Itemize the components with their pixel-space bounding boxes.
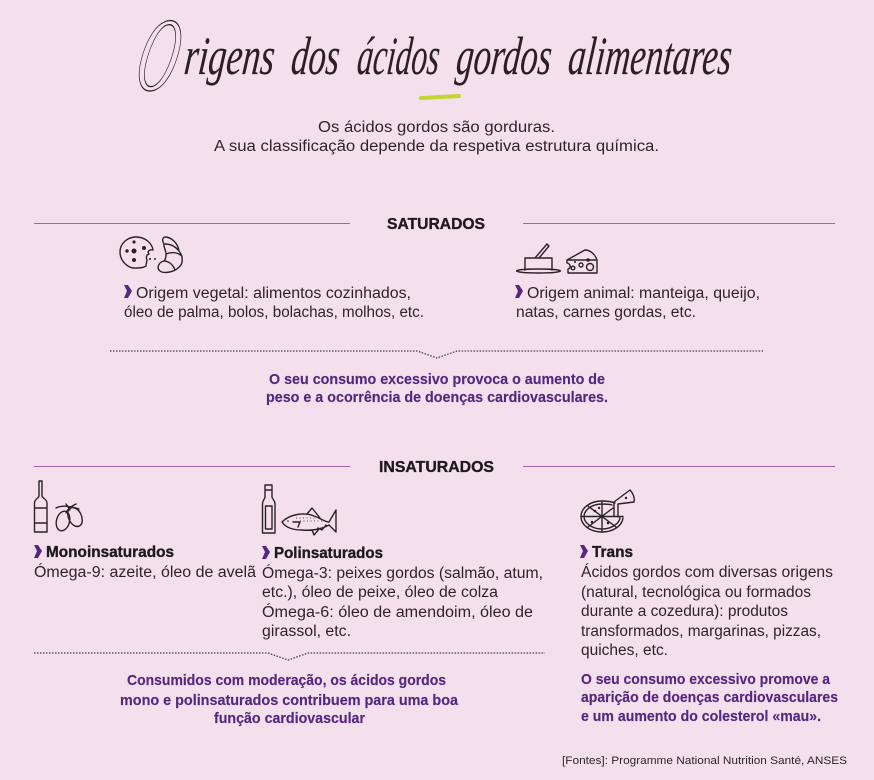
text: trans: Trans	[592, 544, 633, 561]
sources: [Fontes]: Programme National Nutrition Santé, ANSES	[562, 755, 847, 767]
text: monoinsaturados: Monoinsaturados	[46, 544, 174, 561]
callout: mono e polinsaturados: mono e polinsaturados contribuem para uma boa	[120, 692, 459, 709]
bullet	[34, 545, 42, 558]
icon: oil bottle and olives	[34, 481, 85, 532]
callout: trans: e um aumento do colesterol «mau».	[581, 708, 821, 725]
heading: saturados: SATURADOS	[387, 216, 485, 233]
text: trans: transformados, margarinas, pizzas,	[581, 623, 821, 640]
text: origem vegetal: óleo de palma, bolos, bolachas, molhos, etc.	[124, 304, 424, 321]
callout: saturados: O seu consumo excessivo provoca o aumento de	[269, 371, 605, 388]
icon: cookie and croissant	[120, 237, 182, 272]
text: monoinsaturados: Ómega-9: azeite, óleo de avelã	[34, 564, 256, 581]
title	[127, 0, 735, 113]
callout: trans: O seu consumo excessivo promove a	[581, 671, 831, 688]
text: polinsaturados: Ómega-3: peixes gordos (salmão, atum,	[262, 565, 543, 582]
bullet	[262, 546, 270, 559]
text: trans	[581, 544, 833, 659]
title: alimentares	[566, 26, 735, 86]
bullet	[515, 285, 523, 298]
icon: butter and cheese	[516, 244, 597, 273]
intro text: Os ácidos gordos são gorduras.	[318, 119, 555, 136]
text: polinsaturados	[262, 545, 543, 640]
dotted divider	[34, 653, 545, 660]
icon: pizza	[581, 490, 634, 532]
text: origem animal	[516, 285, 760, 321]
callout: trans	[581, 671, 838, 725]
text: polinsaturados: etc.), óleo de peixe, óleo de colza	[262, 584, 498, 601]
text: origem vegetal	[124, 285, 424, 321]
text: trans: quiches, etc.	[581, 642, 668, 659]
callout: mono e polinsaturados: Consumidos com moderação, os ácidos gordos	[127, 672, 446, 689]
intro text	[214, 119, 659, 155]
text: polinsaturados: girassol, etc.	[262, 623, 351, 640]
title: O	[127, 0, 192, 113]
green highlight under title	[421, 96, 459, 98]
dotted divider	[110, 351, 763, 358]
icon: oil bottle and fish	[262, 485, 336, 535]
title: rigens	[182, 26, 278, 86]
title: ácidos	[355, 26, 443, 86]
text: origem animal: natas, carnes gordas, etc.	[516, 304, 696, 321]
callout: trans: aparição de doenças cardiovasculares	[581, 689, 838, 706]
text: origem vegetal: Origem vegetal: alimentos cozinhados,	[136, 285, 411, 302]
text: trans: Ácidos gordos com diversas origens	[581, 564, 833, 581]
title: dos	[289, 26, 343, 86]
callout: mono e polinsaturados: função cardiovascular	[214, 710, 365, 727]
text: polinsaturados: Polinsaturados	[274, 545, 383, 562]
callout: saturados	[266, 371, 608, 406]
text: origem animal: Origem animal: manteiga, queijo,	[527, 285, 760, 302]
text: trans: durante a cozedura): produtos	[581, 603, 788, 620]
text: trans: (natural, tecnológica ou formados	[581, 584, 811, 601]
panel: insaturados	[34, 459, 838, 727]
title: gordos	[454, 26, 555, 86]
panel: saturados	[34, 216, 835, 406]
heading: insaturados: INSATURADOS	[379, 459, 494, 476]
text: monoinsaturados	[34, 544, 256, 581]
intro text: A sua classificação depende da respetiva estrutura química.	[214, 138, 659, 155]
bullet	[124, 285, 132, 298]
callout: saturados: peso e a ocorrência de doenças cardiovasculares.	[266, 389, 608, 406]
callout: mono e polinsaturados	[120, 672, 459, 727]
text: polinsaturados: Ómega-6: óleo de amendoim, óleo de	[262, 604, 533, 621]
bullet	[580, 545, 588, 558]
